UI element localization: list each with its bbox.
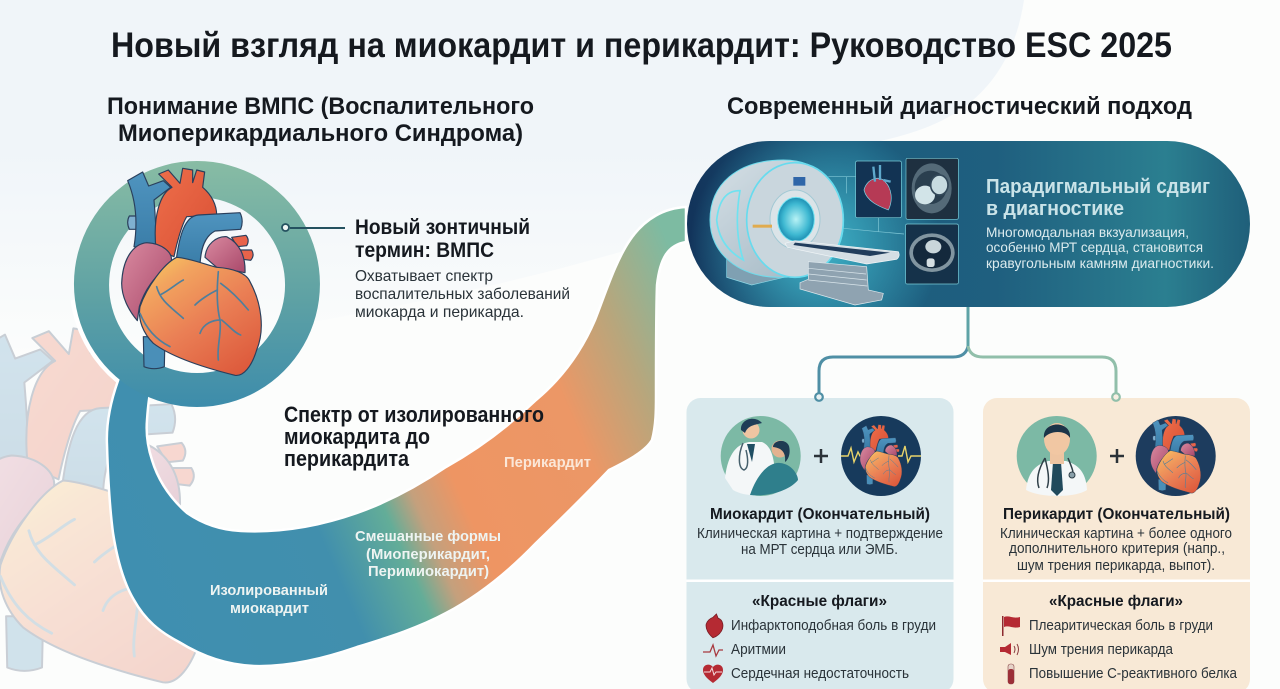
pill body text: кравугольным камням диагностики. xyxy=(986,255,1214,271)
band label: mixed forms: Перимиокардит) xyxy=(368,563,489,580)
card description: дополнительного критерия (напр., xyxy=(1009,541,1225,557)
text block: spectrum heading xyxy=(284,402,544,471)
icon: plus xyxy=(1110,449,1124,463)
card description: на МРТ сердца или ЭМБ. xyxy=(741,542,898,558)
panel: paradigm shift pill xyxy=(687,141,1250,307)
text block: spectrum heading: перикардита xyxy=(284,446,410,471)
icon: doctor xyxy=(1017,416,1097,496)
red flag list: Повышение С-реактивного белка xyxy=(1029,666,1238,682)
pill heading: в диагностике xyxy=(986,198,1124,220)
icon: heart failure xyxy=(703,665,723,683)
text block: umbrella term: воспалительных заболеваний xyxy=(355,286,570,303)
connector: pill to cards xyxy=(815,307,1120,401)
red flags heading: «Красные флаги» xyxy=(752,593,887,610)
heading: understanding section xyxy=(107,93,534,147)
card description: шум трения перикарда, выпот). xyxy=(1017,558,1215,574)
red flags heading: «Красные флаги» xyxy=(1049,593,1183,610)
panel: myocarditis xyxy=(686,398,954,689)
pill body text xyxy=(986,224,1214,271)
panel: pericarditis xyxy=(983,398,1250,689)
red flag list: Инфарктоподобная боль в груди xyxy=(731,618,936,634)
illustration: MRI scanner xyxy=(710,158,958,305)
title: Новый взгляд на миокардит и перикардит: Руководство ESC 2025 xyxy=(111,26,1172,65)
spectrum band xyxy=(107,207,686,666)
icon: flag xyxy=(1002,616,1020,636)
icon: heart with ECG xyxy=(841,416,921,496)
band label: isolated myocarditis xyxy=(210,582,328,617)
pill heading: Парадигмальный сдвиг xyxy=(986,176,1210,198)
red flag list: Аритмии xyxy=(731,642,786,658)
card description xyxy=(697,526,943,558)
text block: spectrum heading: Спектр от изолированного xyxy=(284,402,544,427)
card heading: Перикардит (Окончательный) xyxy=(1003,506,1230,523)
card description: Клиническая картина + подтверждение xyxy=(697,526,943,542)
pill body text: Многомодальная вкзуализация, xyxy=(986,224,1189,240)
pill body text: особенно МРТ сердца, становится xyxy=(986,239,1203,255)
icon: plus xyxy=(814,449,828,463)
band label: isolated myocarditis: миокардит xyxy=(230,600,309,617)
band label: pericarditis: Перикардит xyxy=(504,454,591,471)
text block: umbrella term: Новый зонтичный xyxy=(355,216,530,239)
icon: heart xyxy=(706,614,723,638)
text block: umbrella term: Охватывает спектр xyxy=(355,268,493,285)
text block: umbrella term xyxy=(355,216,570,321)
text block: umbrella term: термин: ВМПС xyxy=(355,239,494,262)
icon: test tube xyxy=(1008,664,1014,684)
card description xyxy=(1000,526,1232,574)
callout marker line xyxy=(282,224,345,231)
band label: mixed forms xyxy=(355,528,501,580)
white halo along lower-left of ring xyxy=(73,300,125,386)
faded background heart xyxy=(0,328,208,683)
text block: spectrum heading: миокардита до xyxy=(284,424,430,449)
red flag list: Сердечная недостаточность xyxy=(731,666,909,682)
icon: speaker xyxy=(1000,643,1018,655)
card heading: Миокардит (Окончательный) xyxy=(710,506,930,523)
screen: cardiac MRI xyxy=(906,158,958,219)
text block: umbrella term: миокарда и перикарда. xyxy=(355,304,524,321)
heading: understanding section: Понимание ВМПС (Воспалительного xyxy=(107,93,534,120)
red flag list xyxy=(1000,616,1238,684)
ring around heart xyxy=(74,161,320,407)
band label: mixed forms: (Миоперикардит, xyxy=(366,546,490,563)
heading: understanding section: Миоперикардиального Синдрома) xyxy=(118,120,523,147)
red flag list xyxy=(703,614,936,683)
pill heading xyxy=(986,176,1210,220)
icon: inflamed heart xyxy=(1136,416,1216,496)
band label: isolated myocarditis: Изолированный xyxy=(210,582,328,599)
screen: chest CT xyxy=(906,224,958,284)
red flag list: Шум трения перикарда xyxy=(1029,642,1174,658)
screen: heart scan xyxy=(856,161,901,218)
icon: doctor with patient xyxy=(721,416,801,496)
band label: mixed forms: Смешанные формы xyxy=(355,528,501,545)
card description: Клиническая картина + более одного xyxy=(1000,526,1232,542)
red flag list: Плеаритическая боль в груди xyxy=(1029,618,1213,634)
icon: anatomical heart xyxy=(122,168,261,375)
heading: diagnostic section: Современный диагностический подход xyxy=(727,93,1192,120)
icon: arrhythmia line xyxy=(703,645,723,656)
